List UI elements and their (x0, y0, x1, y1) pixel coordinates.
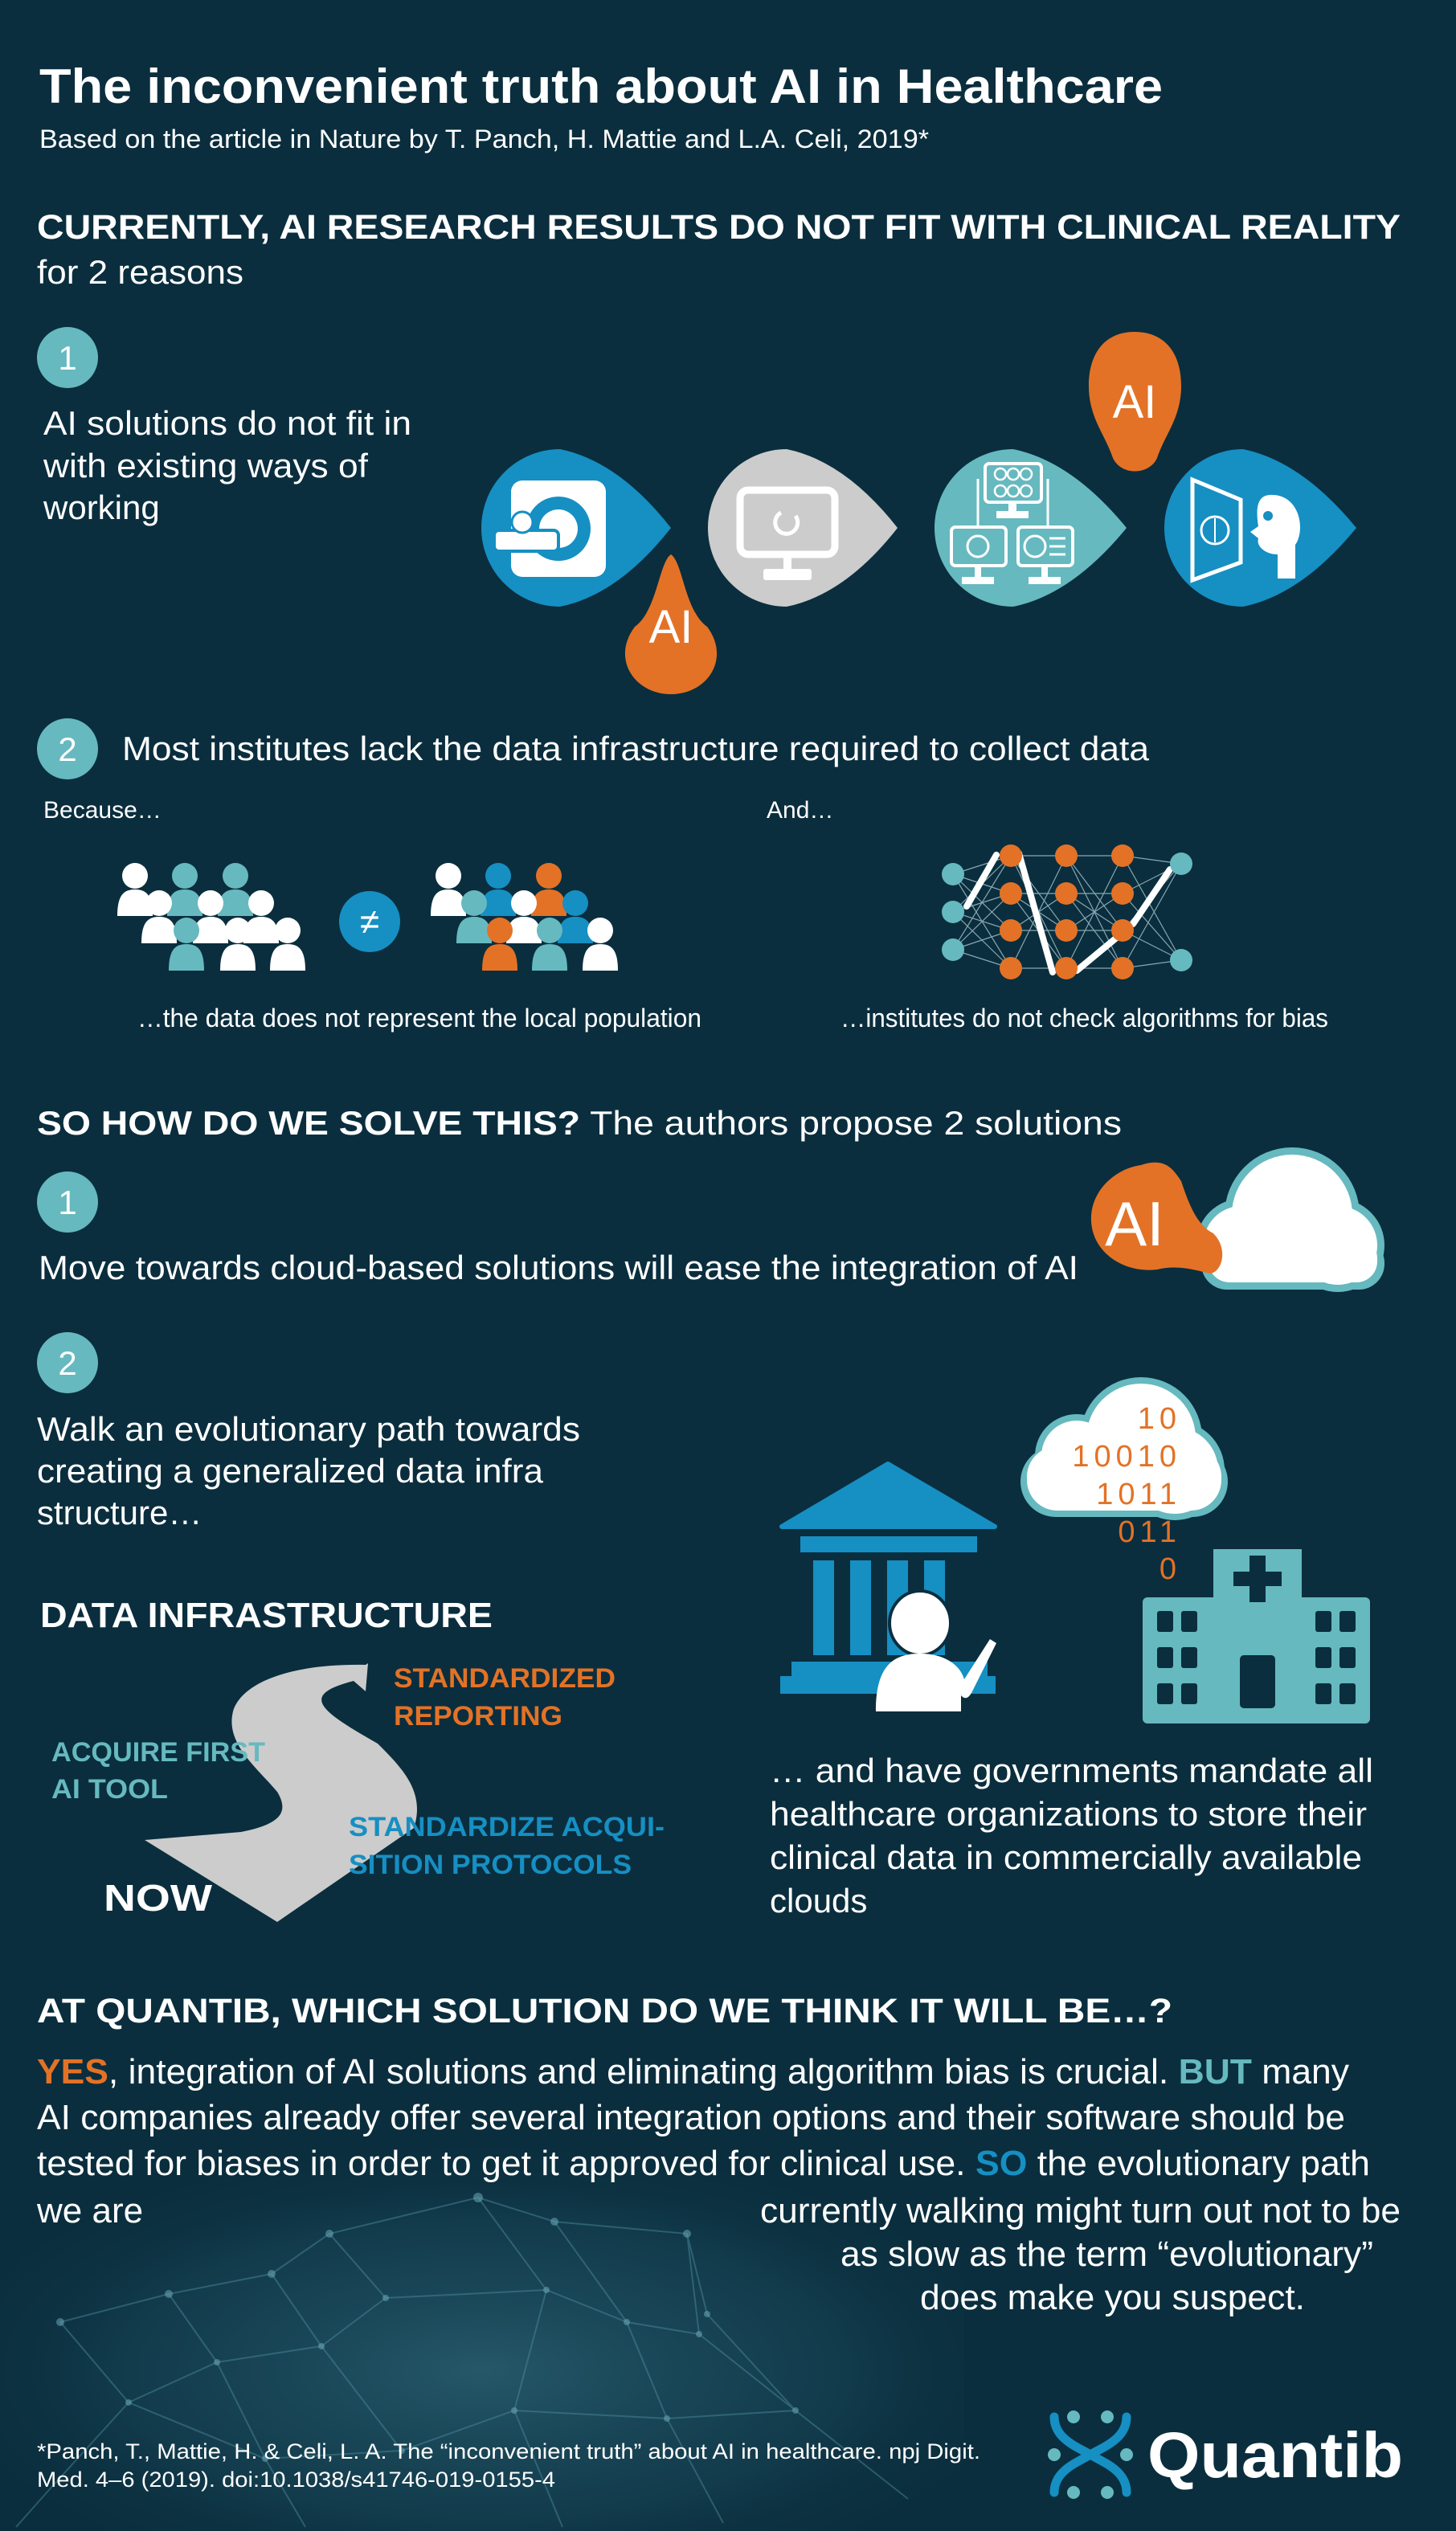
left group (117, 863, 305, 971)
icon: AI blob bottom: AI (649, 601, 693, 653)
icon: hospital (1143, 1549, 1370, 1723)
number badge 2 (37, 718, 98, 779)
number badge solution 2: 2 (58, 1344, 77, 1382)
title: The inconvenient truth about AI in Healthcare (39, 59, 1163, 113)
icon: AI cloud: AI (1105, 1188, 1164, 1259)
number badge solution 1 (37, 1171, 98, 1233)
reason 1 text: working (43, 489, 160, 526)
icon: data cloud: 0 (1159, 1552, 1181, 1586)
number badge 1: 1 (58, 339, 77, 377)
icon: AI blob bottom (625, 554, 717, 694)
icon: scanner (481, 449, 671, 607)
path label: acquire first AI tool: ACQUIRE FIRST (51, 1737, 265, 1768)
path label: acquire first AI tool (51, 1737, 265, 1805)
section heading: currently: for 2 reasons (37, 253, 243, 291)
icon: network of computers (935, 449, 1127, 607)
solution 2 text (37, 1410, 580, 1531)
logo: Quantib: Quantib (1147, 2419, 1403, 2491)
icon: data cloud: 1011 (1096, 1478, 1181, 1511)
label: and: And… (767, 797, 833, 824)
workflow icons row (481, 332, 1356, 694)
path label: standardize acquisition protocols: STANDARDIZE ACQUI- (349, 1812, 665, 1842)
subtitle: Based on the article in Nature by T. Panch, H. Mattie and L.A. Celi, 2019* (39, 125, 929, 153)
icon: screen and person (1164, 449, 1356, 607)
icon: AI blob top: AI (1113, 376, 1156, 428)
governments text (770, 1752, 1373, 1920)
path label: now: NOW (104, 1877, 213, 1919)
path label: standardize acquisition protocols: SITION PROTOCOLS (349, 1850, 632, 1880)
conclusion paragraph: does make you suspect. (920, 2278, 1305, 2317)
not equal sign: ≠ (360, 902, 379, 942)
section heading: solutions: SO HOW DO WE SOLVE THIS? The authors propose 2 solutions (37, 1104, 1122, 1142)
number badge 2: 2 (58, 730, 77, 768)
icon: government building with person (780, 1464, 996, 1711)
right group (431, 863, 618, 971)
background network pattern (0, 2129, 964, 2531)
governments text: healthcare organizations to store their (770, 1795, 1367, 1833)
reason 1 text: with existing ways of (43, 447, 368, 485)
path label: standardized reporting: STANDARDIZED (394, 1663, 616, 1694)
reason 1 text: AI solutions do not fit in (43, 404, 411, 442)
not equal sign (339, 891, 400, 952)
number badge 1 (37, 327, 98, 388)
conclusion paragraph: tested for biases in order to get it approved for clinical use. SO the evolutionary path (37, 2144, 1370, 2183)
section heading: currently (37, 208, 1401, 291)
icon: neural network (942, 844, 1192, 979)
caption: population: …the data does not represent the local population (137, 1004, 701, 1032)
section heading: currently: CURRENTLY, AI RESEARCH RESULTS DO NOT FIT WITH CLINICAL REALITY (37, 208, 1401, 247)
logo: Quantib (1048, 2410, 1403, 2499)
icon: AI blob top (1089, 332, 1181, 471)
footnote: *Panch, T., Mattie, H. & Celi, L. A. The “inconvenient truth” about AI in healthcare. npj Digit. (37, 2439, 980, 2464)
reason 2 text: Most institutes lack the data infrastructure required to collect data (122, 730, 1150, 767)
icon: data cloud: 10 (1138, 1402, 1181, 1436)
solution 2 text: creating a generalized data infra (37, 1452, 544, 1490)
conclusion paragraph: AI companies already offer several integration options and their software should be (37, 2098, 1345, 2137)
heading: data infrastructure: DATA INFRASTRUCTURE (40, 1596, 493, 1635)
number badge solution 1: 1 (58, 1184, 77, 1221)
solution 2 text: structure… (37, 1494, 202, 1531)
solution 1 text: Move towards cloud-based solutions will ease the integration of AI (39, 1249, 1078, 1286)
path label: acquire first AI tool: AI TOOL (51, 1774, 168, 1805)
icon: data cloud (1020, 1377, 1228, 1586)
icon: data cloud: 10010 (1072, 1440, 1181, 1474)
conclusion paragraph: currently walking might turn out not to be (760, 2191, 1401, 2230)
conclusion paragraph: we are (36, 2191, 143, 2230)
path label: standardize acquisition protocols (349, 1812, 665, 1880)
path label: standardized reporting (394, 1663, 616, 1732)
reason 1 text (43, 404, 411, 526)
heading: Quantib opinion: AT QUANTIB, WHICH SOLUTION DO WE THINK IT WILL BE…? (37, 1992, 1172, 2030)
label: because: Because… (43, 797, 162, 824)
caption: bias: …institutes do not check algorithms for bias (840, 1004, 1328, 1032)
governments text: … and have governments mandate all (770, 1752, 1373, 1789)
governments text: clouds (770, 1882, 867, 1920)
icon: AI cloud (1091, 1147, 1384, 1292)
conclusion paragraph (36, 2052, 1401, 2317)
conclusion paragraph: as slow as the term “evolutionary” (840, 2235, 1373, 2274)
governments text: clinical data in commercially available (770, 1838, 1362, 1876)
icon: population groups (117, 863, 618, 971)
footnote: Med. 4–6 (2019). doi:10.1038/s41746-019-0155-4 (37, 2468, 555, 2492)
arrow: evolutionary path (145, 1663, 417, 1922)
conclusion paragraph: YES, integration of AI solutions and eliminating algorithm bias is crucial. BUT many (37, 2052, 1349, 2091)
solution 2 text: Walk an evolutionary path towards (37, 1410, 580, 1448)
icon: monitor (708, 449, 898, 607)
footnote (37, 2439, 980, 2492)
number badge solution 2 (37, 1332, 98, 1393)
path label: standardized reporting: REPORTING (394, 1701, 562, 1732)
icon: data cloud: 011 (1118, 1515, 1181, 1549)
